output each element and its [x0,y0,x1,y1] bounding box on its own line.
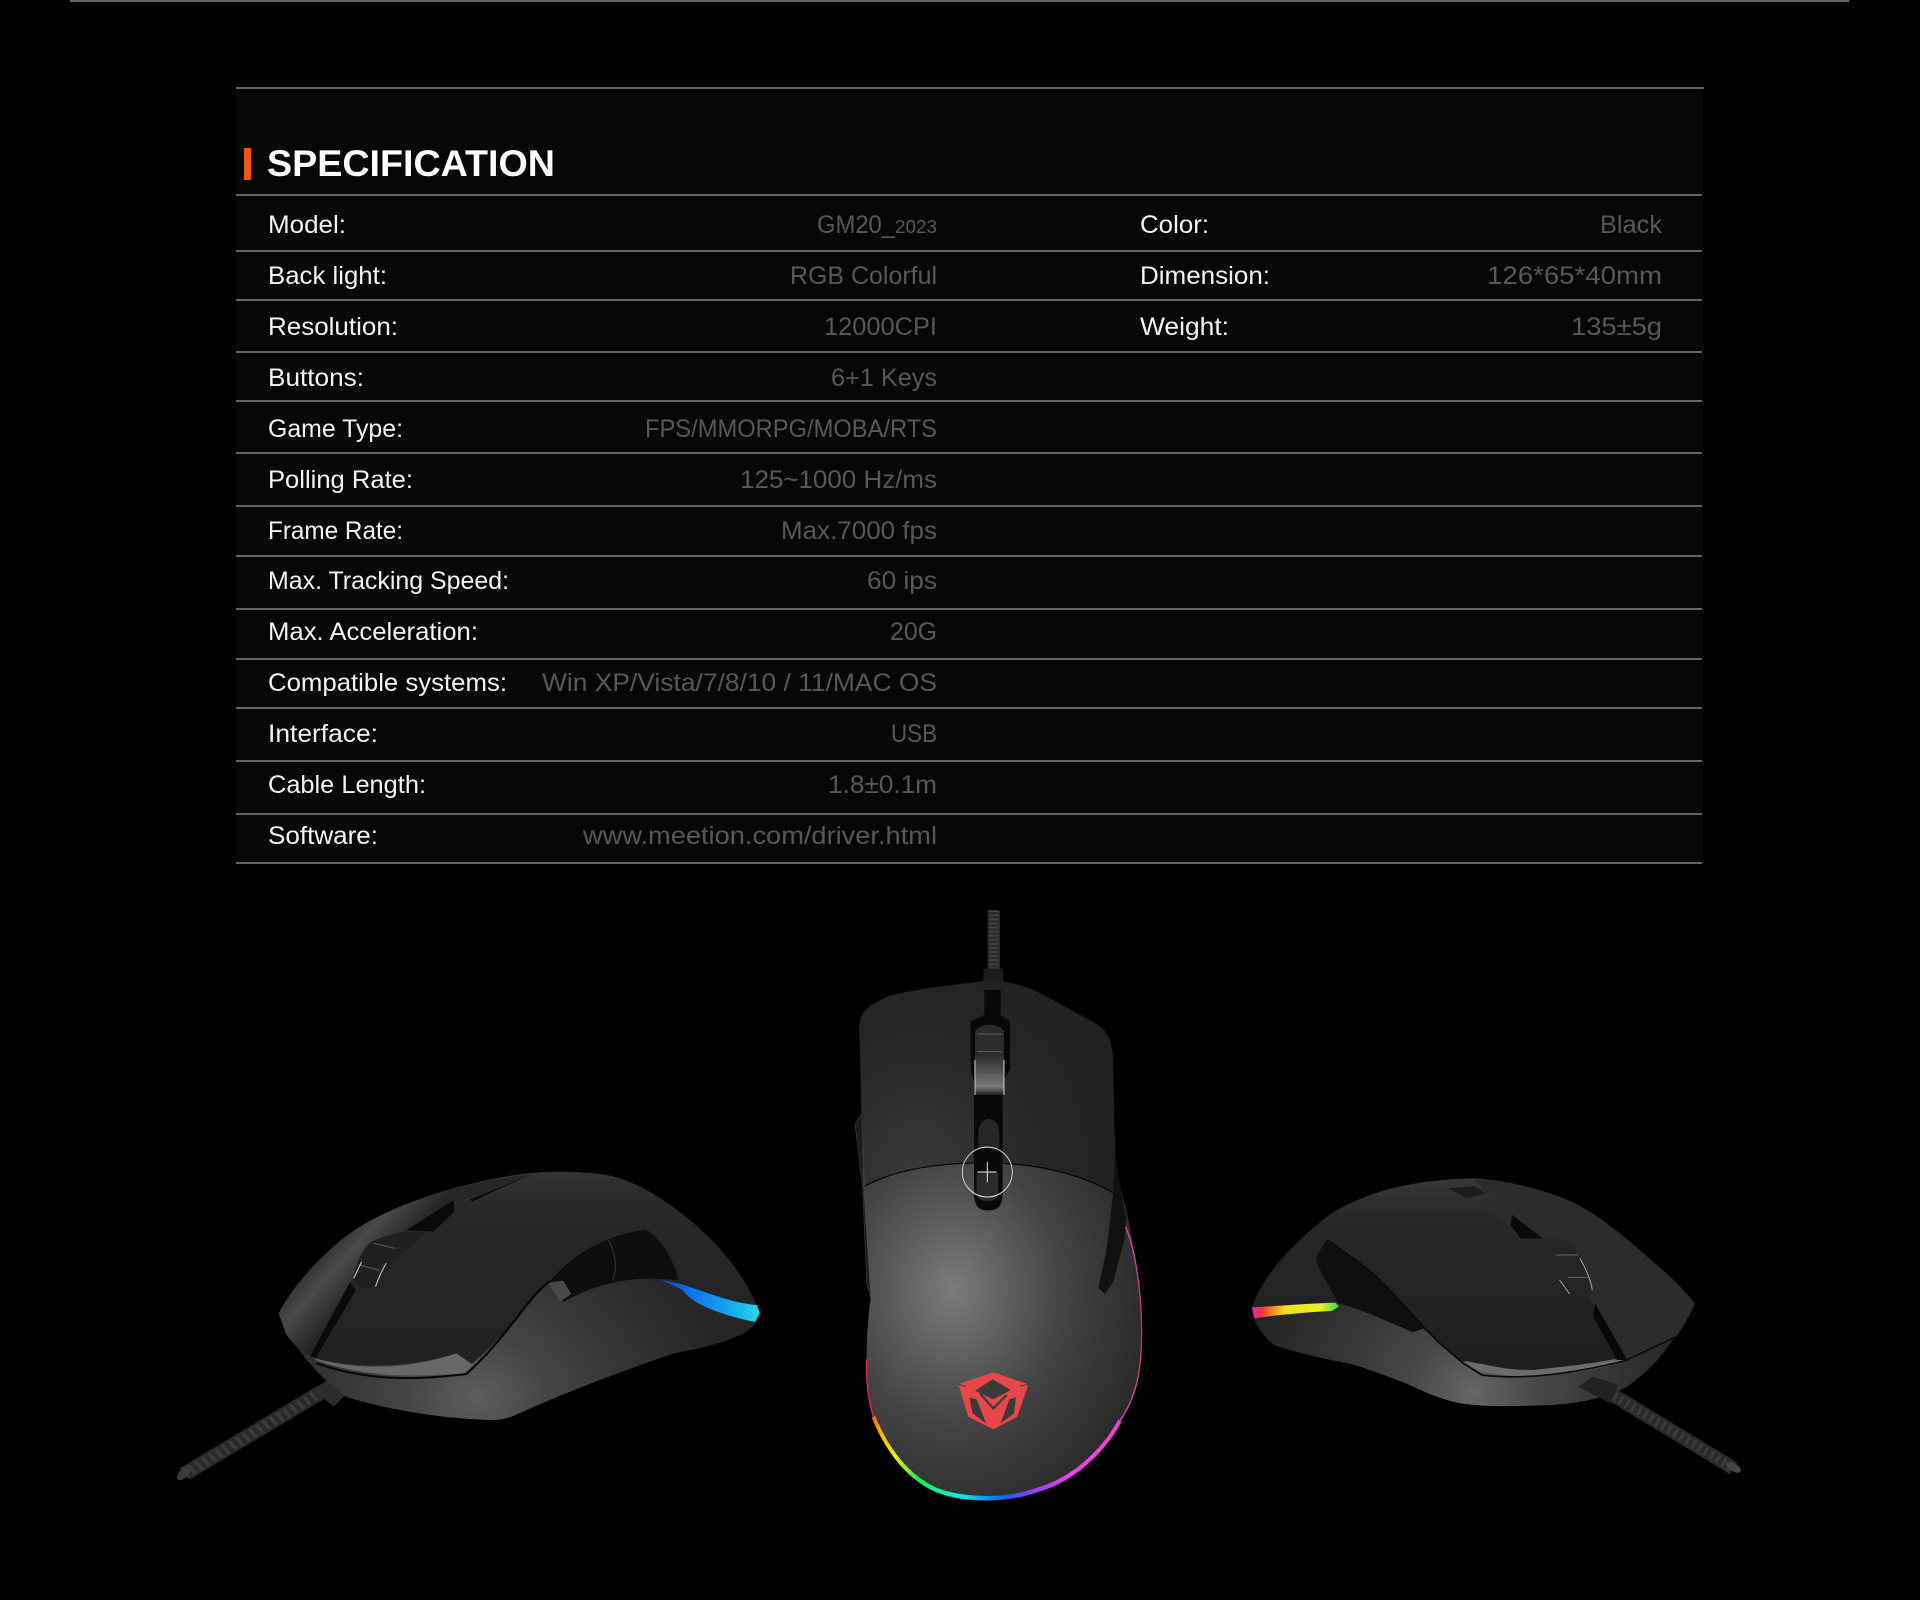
row: dimension [1140,262,1662,290]
row: interface: USB [891,720,937,748]
row: resolution [268,313,937,341]
upper shell [859,981,1115,1193]
row: polling rate: Polling Rate: [268,466,413,494]
side buttons [855,1110,879,1298]
row: back light: Back light: [268,262,387,290]
row: software: Software: [268,822,378,850]
top shell [279,1172,757,1373]
row: frame rate: Frame Rate: [268,517,403,545]
scroll wheel [354,1232,426,1288]
lower body [1252,1250,1680,1406]
row: weight: Weight: [1140,313,1229,341]
illustration: mouse top view [855,910,1142,1498]
dark slits [310,1174,533,1357]
lower body [279,1250,760,1420]
row: interface [268,720,937,748]
led ring [867,1227,1142,1498]
row: game type: Game Type: [268,415,403,443]
illustration: mouse right side view [1252,1178,1743,1475]
row: frame rate [268,517,937,545]
row: frame rate: Max.7000 fps [781,517,937,545]
row: dimension: 126*65*40mm [1487,262,1662,290]
cable [174,1378,352,1482]
row: model: Model: [268,211,346,239]
cable [1602,1388,1743,1475]
cable collar [1578,1377,1619,1403]
scroll slot [971,990,1010,1210]
row: weight: 135±5g [1571,313,1662,341]
row: model: 2023 [895,217,937,237]
row: software [268,822,937,850]
row: compatible systems: Win XP/Vista/7/8/10 / 11/MAC OS [542,669,937,697]
scroll wheel [1524,1240,1592,1297]
right grip [1098,1151,1126,1294]
row: buttons: 6+1 Keys [831,364,937,392]
row: weight [1140,313,1662,341]
row: polling rate [268,466,937,494]
top divider bar [70,0,1849,2]
seam [315,1353,473,1375]
row: cable length: 1.8±0.1m [828,771,937,799]
row: max acceleration [268,618,937,646]
gloss band [279,1174,532,1357]
row: cable length: Cable Length: [268,771,426,799]
led strip [1252,1303,1339,1318]
row: resolution: Resolution: [268,313,398,341]
row: buttons: Buttons: [268,364,364,392]
logo [958,1372,1028,1429]
row: dimension: Dimension: [1140,262,1270,290]
row: software: www.meetion.com/driver.html [582,822,937,850]
row: max tracking speed [268,567,937,595]
panel: specification table [236,87,1704,864]
dpi buttons [978,1119,999,1148]
top buttons and slot [1448,1186,1627,1360]
side recess [549,1229,679,1302]
top shell [1252,1178,1695,1370]
row: interface: Interface: [268,720,378,748]
row: max tracking speed: 60 ips [867,567,937,595]
row: color: Black [1600,211,1662,239]
row: max acceleration: 20G [890,618,937,646]
row: model [268,211,937,239]
row: back light: RGB Colorful [790,262,937,290]
row: polling rate: 125~1000 Hz/ms [740,466,937,494]
row: resolution: 12000CPI [824,313,937,341]
crosshair marker [962,1147,1012,1197]
led strip [660,1279,760,1322]
seam [1463,1359,1627,1377]
heading: specification: SPECIFICATION [267,143,555,184]
side recess [1316,1240,1424,1332]
illustration: mouse left side view [174,1172,760,1482]
row: game type [268,415,937,443]
row: buttons [268,364,937,392]
row: compatible systems [268,669,937,697]
gloss band [1473,1178,1695,1361]
row: color [1140,211,1662,239]
body [859,981,1142,1498]
row: cable length [268,771,937,799]
row: max acceleration: Max. Acceleration: [268,618,478,646]
cable [983,910,1003,990]
row: back light [268,262,937,290]
row: color: Color: [1140,211,1209,239]
row: model: GM20_ [817,211,896,239]
scroll wheel [975,1025,1004,1095]
row: compatible systems: Compatible systems: [268,669,507,697]
row: max tracking speed: Max. Tracking Speed: [268,567,509,595]
row: game type: FPS/MMORPG/MOBA/RTS [645,415,937,443]
